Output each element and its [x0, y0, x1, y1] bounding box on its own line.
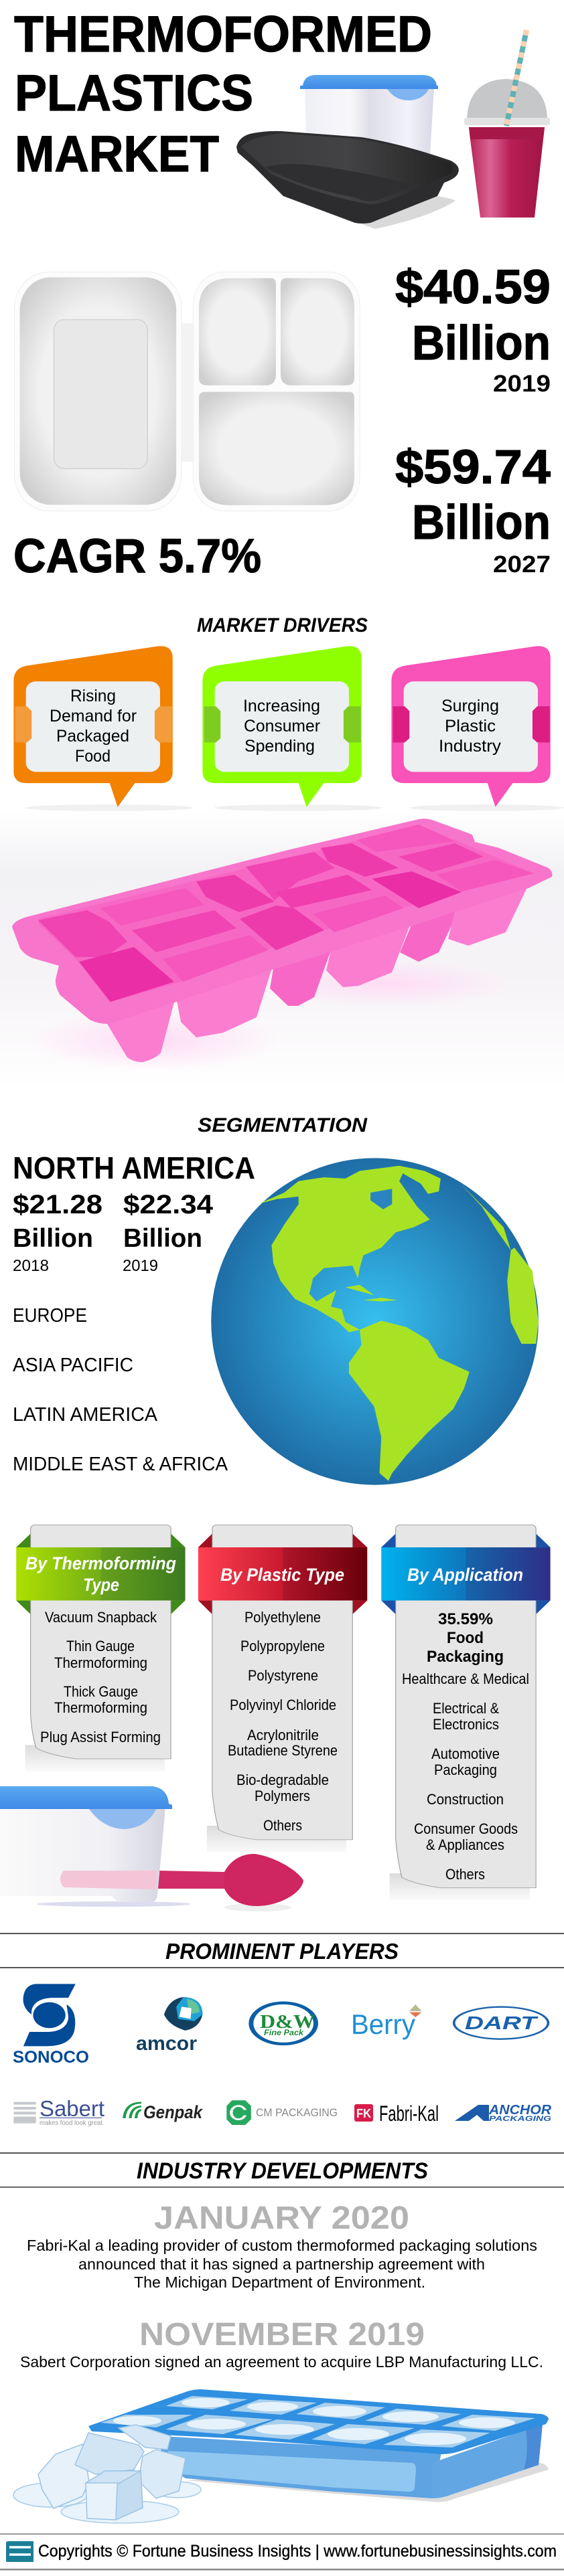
logo: Dart: DART: [465, 2012, 539, 2033]
panel: by plastic type: [198, 1525, 367, 1852]
panel: by plastic type: By Plastic Type: [220, 1565, 344, 1585]
icon: white compartment lunch tray: [14, 272, 360, 511]
market value 2027: $59.74: [395, 441, 551, 494]
panel: driver consumer spending: [202, 646, 362, 807]
market value 2019: 2019: [493, 371, 551, 397]
logo: Sabert: makes food look great: [40, 2120, 102, 2127]
panel: driver rising demand: [13, 646, 173, 807]
panel: by thermoforming type: Thin Gauge: [66, 1638, 135, 1654]
region: north america: Billion: [13, 1224, 93, 1253]
logo: Genpak: Genpak: [143, 2102, 204, 2122]
panel: by thermoforming type: Thick Gauge: [64, 1683, 138, 1700]
heading: industry developments: INDUSTRY DEVELOPMENTS: [137, 2158, 428, 2184]
heading: prominent players: PROMINENT PLAYERS: [165, 1939, 399, 1964]
icon: container and pink spoon: [0, 1786, 303, 1911]
region: north america: $22.34: [123, 1190, 214, 1219]
logo: Fabri-Kal: FK: [356, 2107, 371, 2120]
panel: by thermoforming type: Thermoforming: [54, 1654, 147, 1671]
panel: by plastic type: Bio-degradable: [236, 1772, 329, 1788]
panel: by plastic type: Polymers: [255, 1788, 310, 1804]
panel: by application: Packaging: [427, 1648, 504, 1666]
panel: driver rising demand: Rising: [70, 687, 116, 705]
panel: driver plastic industry: [391, 646, 551, 807]
development: January 2020: [27, 2201, 537, 2291]
title: THERMOFORMED: [14, 6, 432, 63]
region: north america: 2019: [123, 1257, 158, 1275]
photo background: ice tray: [0, 810, 564, 1088]
market value 2027: Billion: [412, 496, 551, 549]
panel: by application: Packaging: [434, 1762, 497, 1778]
logo: Sonoco: SONOCO: [13, 2048, 89, 2067]
panel: driver rising demand: Packaged: [56, 727, 129, 746]
panel: by thermoforming type: Type: [83, 1575, 119, 1595]
panel: by plastic type: Polyethylene: [244, 1609, 321, 1626]
region list: EUROPE: [13, 1305, 87, 1326]
panel: by application: [381, 1525, 551, 1900]
panel: by plastic type: Butadiene Styrene: [228, 1742, 338, 1759]
region: north america: Billion: [123, 1224, 202, 1253]
region: north america: NORTH AMERICA: [13, 1150, 255, 1185]
logo: D&W Fine Pack: [251, 2003, 315, 2044]
logo: Anchor Packaging: [455, 2103, 552, 2123]
panel: driver rising demand: Demand for: [50, 707, 137, 725]
market value 2027: 2027: [493, 551, 551, 578]
panel: by application: By Application: [407, 1565, 523, 1585]
logo: D&W Fine Pack: D&W: [260, 2012, 315, 2033]
logo: Sonoco: [13, 1984, 89, 2067]
footer: [0, 2534, 564, 2570]
logo: CM Packaging: CM PACKAGING: [256, 2106, 338, 2119]
panel: by application: Healthcare & Medical: [402, 1670, 529, 1687]
panel: by application: Electronics: [433, 1716, 499, 1733]
development: November 2019: NOVEMBER 2019: [139, 2317, 425, 2352]
market value 2019: $40.59: [395, 261, 551, 314]
logo: Fabri-Kal: Fabri-Kal: [379, 2101, 439, 2126]
logo: Sabert: [13, 2096, 104, 2127]
development: January 2020: announced that it has signed a partnership agreement with: [78, 2255, 485, 2273]
title: MARKET: [15, 126, 219, 183]
panel: by application: Consumer Goods: [414, 1820, 518, 1837]
logo: D&W Fine Pack: Fine Pack: [264, 2028, 304, 2037]
panel: by plastic type: Polystyrene: [248, 1667, 318, 1684]
development: November 2019: Sabert Corporation signed an agreement to acquire LBP Manufacturing LLC.: [20, 2353, 543, 2371]
panel: by plastic type: Acrylonitrile: [247, 1727, 319, 1743]
development: January 2020: JANUARY 2020: [154, 2201, 409, 2236]
panel: by thermoforming type: By Thermoforming: [25, 1553, 176, 1573]
panel: by application: Electrical &: [433, 1700, 499, 1717]
icon: plastic food container with blue lid: [300, 75, 438, 155]
panel: by thermoforming type: [16, 1525, 186, 1772]
development: January 2020: Fabri-Kal a leading provider of custom thermoformed packaging solutions: [27, 2237, 537, 2254]
market value 2019: [395, 261, 551, 397]
panel: by plastic type: Others: [263, 1817, 302, 1834]
market value 2027: [395, 441, 551, 578]
title: [14, 6, 432, 183]
panel: driver rising demand: Food: [75, 747, 111, 766]
development: January 2020: The Michigan Department of Environment.: [134, 2273, 425, 2291]
panel: by plastic type: Polypropylene: [240, 1638, 325, 1654]
panel: driver plastic industry: Plastic: [445, 717, 496, 736]
panel: by thermoforming type: Vacuum Snapback: [45, 1609, 157, 1626]
region list: LATIN AMERICA: [13, 1404, 158, 1426]
panel: driver consumer spending: Spending: [244, 737, 315, 756]
panel: by application: Construction: [427, 1791, 504, 1808]
heading: market drivers: MARKET DRIVERS: [197, 614, 368, 636]
callout shadows: [25, 804, 564, 811]
CAGR figure: CAGR 5.7%: [13, 530, 261, 583]
icon: globe: [211, 1158, 539, 1485]
panel: driver plastic industry: Industry: [439, 737, 502, 756]
logo: Anchor Packaging: PACKAGING: [489, 2115, 552, 2123]
panel: by plastic type: Polyvinyl Chloride: [230, 1697, 336, 1713]
region list: MIDDLE EAST & AFRICA: [13, 1454, 228, 1475]
logo: Amcor: [136, 1997, 202, 2055]
panel: driver plastic industry: Surging: [441, 697, 499, 715]
market value 2019: Billion: [412, 317, 551, 370]
icon: smoothie cup with straw: [464, 30, 550, 218]
panel: driver consumer spending: Consumer: [244, 717, 320, 736]
panel: by application: Others: [445, 1866, 485, 1883]
region: north america: $21.28: [13, 1190, 102, 1219]
logo: Dart: [454, 2007, 548, 2039]
logo: Sabert: Sabert: [40, 2096, 104, 2121]
heading: segmentation: SEGMENTATION: [198, 1114, 368, 1136]
region: north america: 2018: [13, 1257, 49, 1275]
icon: black plastic tray: [236, 131, 459, 229]
logo: Fabri-Kal: [354, 2101, 439, 2126]
logo: CM Packaging: [226, 2100, 338, 2125]
logo: Amcor: amcor: [136, 2033, 197, 2055]
region: north america: [13, 1150, 255, 1275]
logo: Anchor Packaging: ANCHOR: [488, 2103, 552, 2118]
panel: by application: Food: [447, 1629, 484, 1647]
panel: by application: 35.59%: [438, 1610, 493, 1628]
logo: Berry: Berry: [351, 2008, 415, 2040]
panel: by application: Automotive: [431, 1745, 500, 1762]
panel: driver consumer spending: Increasing: [243, 697, 320, 715]
icon: blue ice tray with ice cubes: [13, 2389, 549, 2523]
development: November 2019: [20, 2317, 543, 2371]
region list: ASIA PACIFIC: [13, 1355, 133, 1376]
icon: pink ice cube tray: [12, 819, 552, 1071]
region list: [13, 1305, 228, 1475]
panel: by thermoforming type: Plug Assist Forming: [40, 1729, 161, 1745]
title: PLASTICS: [15, 65, 253, 122]
panel: by thermoforming type: Thermoforming: [54, 1699, 147, 1716]
panel: by application: & Appliances: [426, 1836, 504, 1853]
